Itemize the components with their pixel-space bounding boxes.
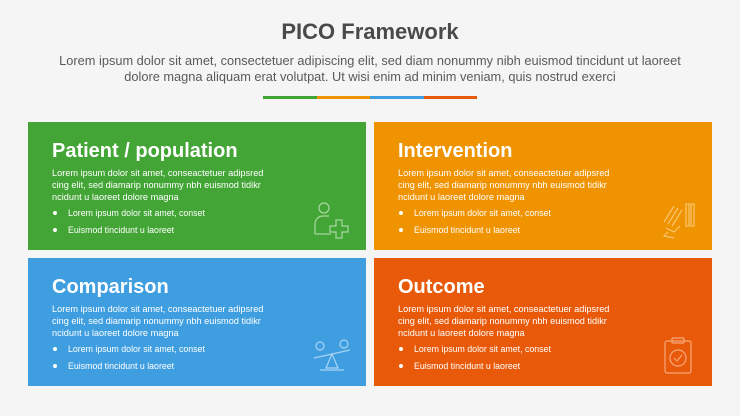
panel: comparison: Lorem ipsum dolor sit amet, conseactetuer adipsred cing elit, sed diamarip nonummy nbh euismod tidikr ncidunt u laoreet dolore magna (52, 304, 263, 338)
panel: comparison (28, 258, 366, 386)
title: PICO Framework (281, 19, 459, 44)
panel: outcome (374, 258, 712, 386)
panel: patient: Patient / population (52, 140, 238, 162)
panel: patient: Euismod tincidunt u laoreet (68, 225, 174, 235)
panel: intervention: Intervention (398, 140, 512, 162)
panel: outcome: Euismod tincidunt u laoreet (414, 361, 520, 371)
panel: patient: Lorem ipsum dolor sit amet, conset (68, 208, 205, 218)
panel: outcome: Lorem ipsum dolor sit amet, conset (414, 344, 551, 354)
icon: person plus (314, 202, 349, 239)
panel: intervention: Euismod tincidunt u laoreet (414, 225, 520, 235)
panel: outcome: Lorem ipsum dolor sit amet, conseactetuer adipsred cing elit, sed diamarip nonummy nbh euismod tidikr ncidunt u laoreet dolore magna (398, 304, 609, 338)
icon: clipboard check (664, 337, 692, 374)
panel: patient: Lorem ipsum dolor sit amet, conseactetuer adipsred cing elit, sed diamarip nonummy nbh euismod tidikr ncidunt u laoreet dolore magna (52, 168, 263, 202)
panel: intervention (374, 122, 712, 250)
panel: intervention: Lorem ipsum dolor sit amet, conset (414, 208, 551, 218)
color bar (263, 96, 477, 99)
panel: comparison: Lorem ipsum dolor sit amet, conset (68, 344, 205, 354)
panel: outcome: Outcome (398, 276, 485, 298)
panel: intervention: Lorem ipsum dolor sit amet, conseactetuer adipsred cing elit, sed diamarip nonummy nbh euismod tidikr ncidunt u laoreet dolore magna (398, 168, 609, 202)
panel: comparison: Comparison (52, 276, 169, 298)
panel: patient (28, 122, 366, 250)
icon: seesaw (314, 339, 350, 371)
subtitle: Lorem ipsum dolor sit amet, consectetuer adipiscing elit, sed diam nonummy nibh euismod tincidunt ut laoreet dolore magna aliquam erat volutpat. Ut wisi enim ad minim veniam, quis nostrud exerci (59, 53, 681, 84)
panel: comparison: Euismod tincidunt u laoreet (68, 361, 174, 371)
icon: hand (662, 203, 695, 239)
